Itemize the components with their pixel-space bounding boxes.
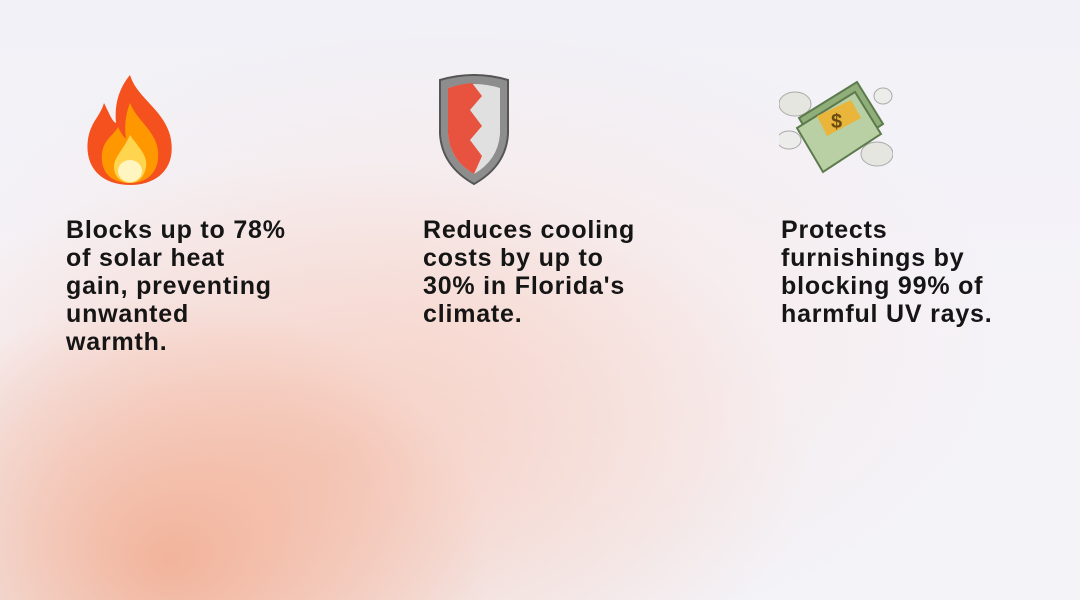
- text: UV: Protects: [781, 216, 887, 244]
- panel: heat: [66, 75, 286, 356]
- text: cooling: [423, 216, 635, 328]
- text: heat: Blocks up to 78%: [66, 216, 286, 244]
- text: cooling: Reduces cooling: [423, 216, 635, 244]
- icon: flying money: [779, 80, 893, 174]
- text: heat: warmth.: [66, 328, 167, 356]
- panel: cooling: [423, 74, 635, 328]
- text: heat: gain, preventing: [66, 272, 272, 300]
- text: UV: blocking 99% of: [781, 272, 983, 300]
- text: heat: [66, 216, 286, 356]
- panel: UV: [779, 80, 992, 328]
- icon: shield: [439, 74, 509, 186]
- text: heat: of solar heat: [66, 244, 225, 272]
- text: cooling: 30% in Florida's: [423, 272, 625, 300]
- text: UV: [781, 216, 992, 328]
- icon: fire: [87, 75, 172, 185]
- text: heat: unwanted: [66, 300, 189, 328]
- text: UV: harmful UV rays.: [781, 300, 992, 328]
- text: cooling: climate.: [423, 300, 523, 328]
- text: UV: furnishings by: [781, 244, 964, 272]
- text: cooling: costs by up to: [423, 244, 604, 272]
- icon: flying money: $: [831, 111, 842, 133]
